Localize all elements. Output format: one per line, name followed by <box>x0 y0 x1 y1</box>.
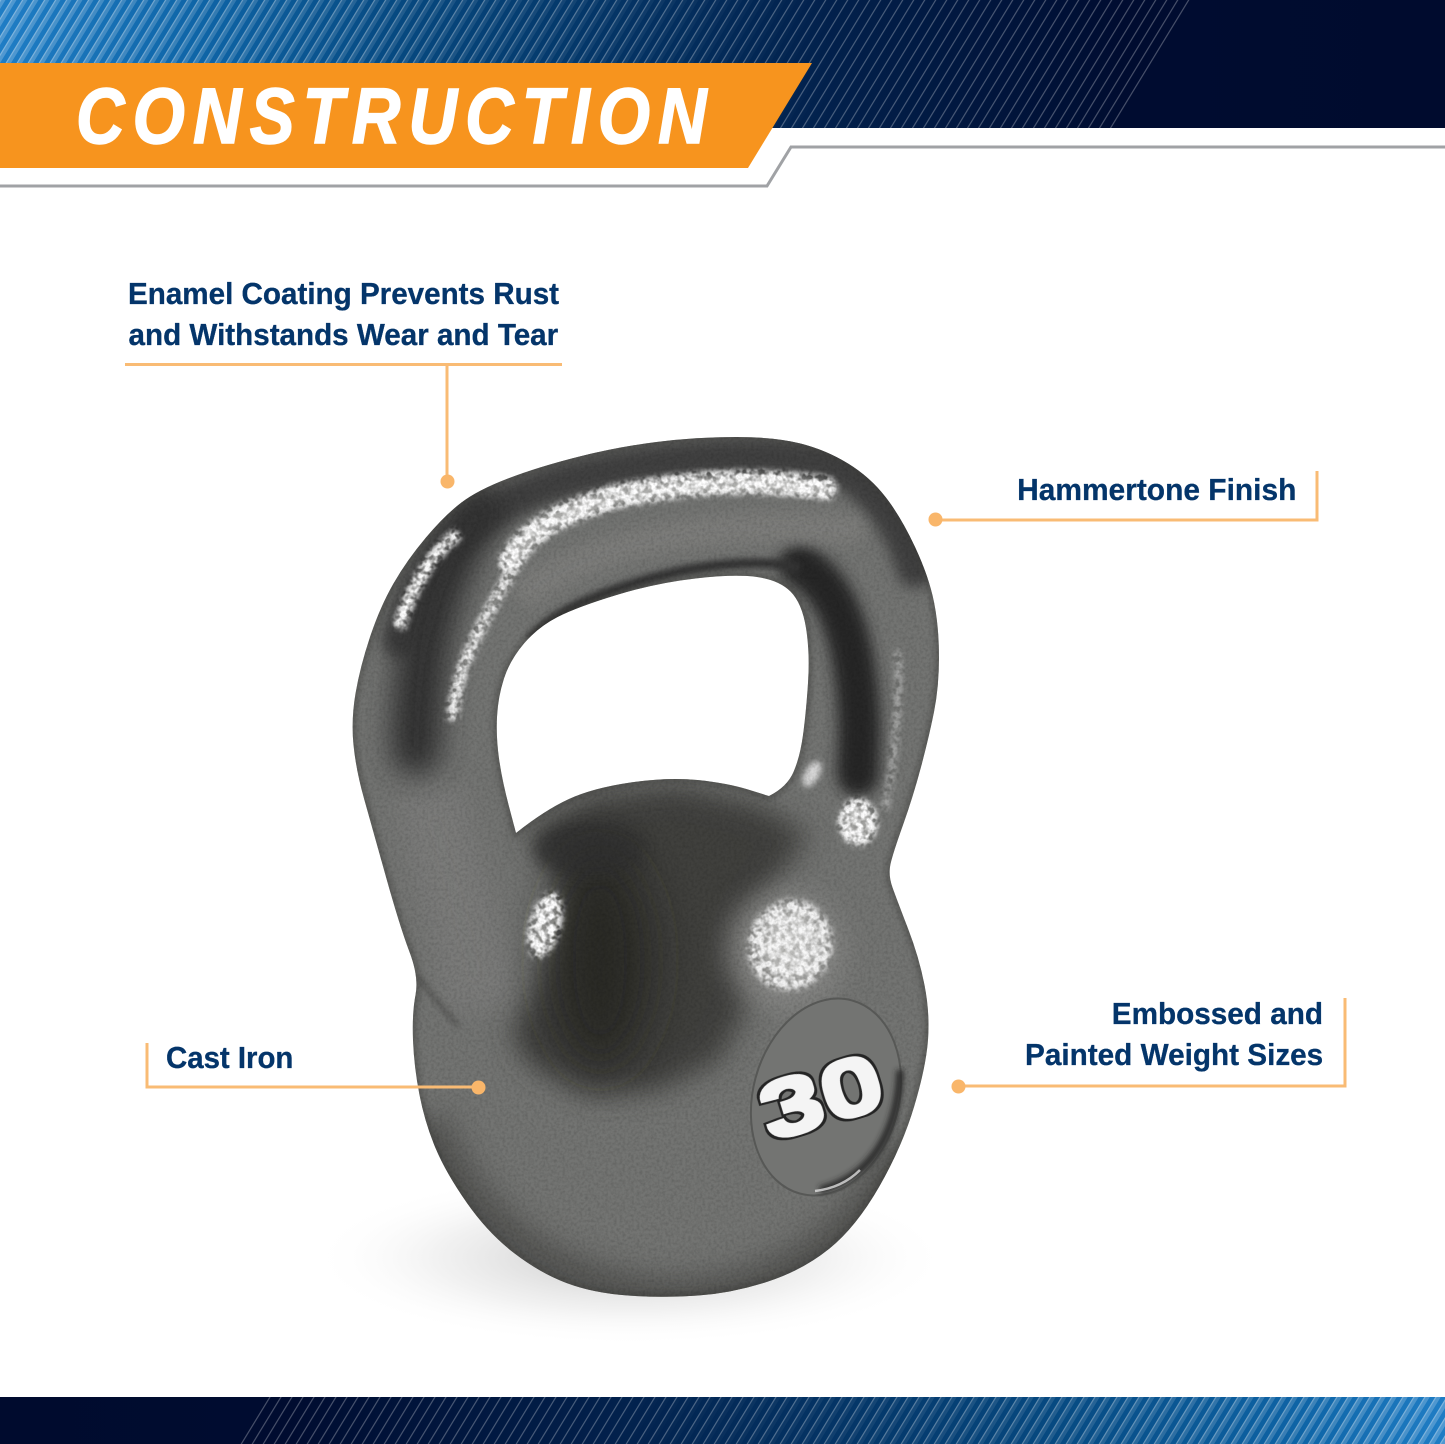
rim above hole <box>530 563 800 640</box>
disc rim shadow <box>820 1070 900 1190</box>
inner lit handle <box>530 528 850 590</box>
handle top dark band <box>400 457 915 640</box>
callout text: enamel coating <box>128 276 559 352</box>
kettlebell <box>340 430 950 1310</box>
ball dark area <box>510 785 810 1095</box>
specular: ball left <box>530 896 560 954</box>
header grey rule <box>0 147 1445 186</box>
footer band <box>0 1397 1445 1444</box>
title banner <box>0 63 812 168</box>
callout text: embossed and painted: Embossed and <box>1112 996 1323 1031</box>
edge darkening <box>353 437 939 1297</box>
embossed 30: 30 <box>749 1035 894 1158</box>
lit lower handle <box>430 790 480 1010</box>
callout line: cast iron <box>147 1043 486 1094</box>
specular: handle top <box>510 482 825 562</box>
weight disc <box>730 982 922 1212</box>
callout line: embossed <box>952 998 1345 1094</box>
header band <box>0 0 1445 128</box>
handle right dark band <box>800 565 859 775</box>
ball lower shading <box>425 1120 905 1300</box>
highlight underlay: handle top <box>512 484 825 560</box>
callout text: cast iron: Cast Iron <box>166 1040 293 1075</box>
callout text: enamel coating: and Withstands Wear and Tear <box>129 317 558 352</box>
specular: right joint <box>844 804 872 840</box>
specular: handle left <box>399 535 455 628</box>
callout text: hammertone finish: Hammertone Finish <box>1017 472 1296 507</box>
hammered texture <box>340 430 950 1310</box>
title: CONSTRUCTION <box>76 71 715 160</box>
handle crease <box>419 977 458 1026</box>
callout text: enamel coating: Enamel Coating Prevents Rust <box>128 276 559 311</box>
disc rim sparkle <box>815 1170 860 1191</box>
kettlebell shading <box>340 430 950 1310</box>
callout text: embossed and painted <box>1025 996 1323 1072</box>
handle left dark band <box>416 510 480 750</box>
kettlebell shadow <box>310 1170 950 1346</box>
ball highlight <box>727 890 843 1010</box>
callout line: enamel <box>125 364 562 488</box>
callout text: embossed and painted: Painted Weight Sizes <box>1025 1037 1323 1072</box>
callout line: hammertone <box>928 471 1317 526</box>
